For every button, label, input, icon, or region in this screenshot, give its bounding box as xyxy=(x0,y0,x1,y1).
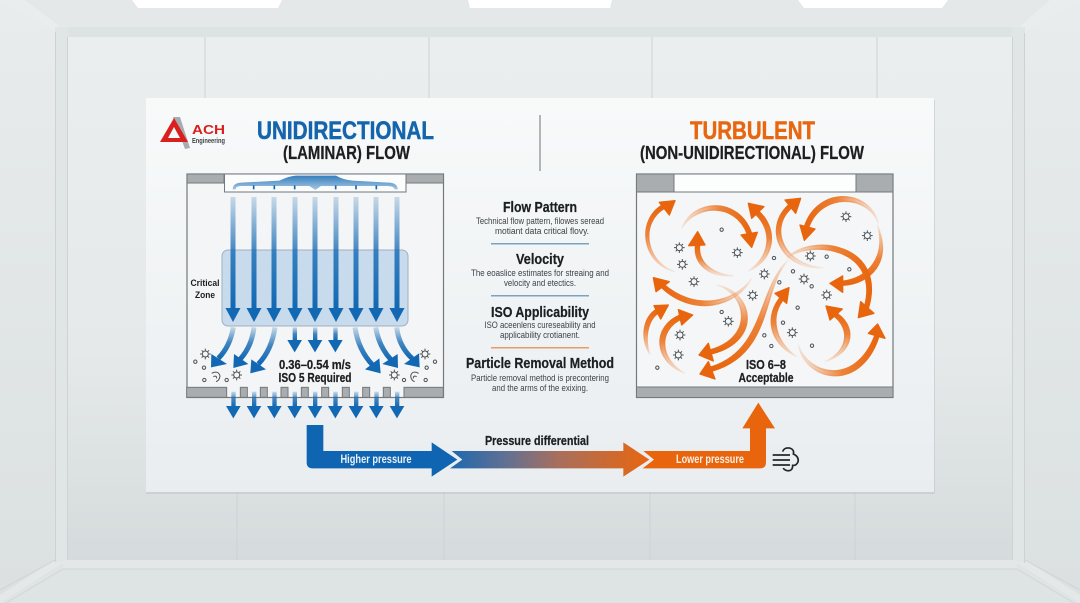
label: velocity and ISO 5 xyxy=(278,357,352,385)
item: velocity: The eoaslice estimates for streaing and xyxy=(471,268,609,278)
icon: air exhaust xyxy=(773,448,798,471)
item: ISO applicability xyxy=(484,304,596,340)
item: ISO applicability: ISO aceenlens cureseability and xyxy=(484,320,596,330)
label: ISO 6-8 acceptable xyxy=(738,357,794,385)
HEPA diffuser air spread xyxy=(233,176,398,190)
item: particle removal method: Particle Removal Method xyxy=(466,355,614,372)
floor grille xyxy=(187,387,443,397)
label: ISO 6-8 acceptable: ISO 6–8 xyxy=(746,357,786,372)
item: flow pattern: motiant data critical flovy. xyxy=(495,226,589,236)
heading: unidirectional xyxy=(257,117,434,163)
comparison column xyxy=(466,199,614,393)
critical zone xyxy=(222,250,408,326)
heading: unidirectional: UNIDIRECTIONAL xyxy=(257,117,434,145)
label: lower pressure: Lower pressure xyxy=(676,454,744,466)
logo: ACH Engineering: ACH xyxy=(192,122,225,137)
logo: ACH Engineering xyxy=(160,117,225,149)
item: flow pattern xyxy=(476,199,604,236)
pressure differential arrow xyxy=(307,403,798,477)
heading: unidirectional: (LAMINAR) FLOW xyxy=(283,143,410,163)
label: higher pressure: Higher pressure xyxy=(340,454,412,466)
logo: ACH Engineering: Engineering xyxy=(192,138,225,145)
item: velocity xyxy=(471,251,609,288)
item: flow pattern: Flow Pattern xyxy=(503,199,577,216)
heading: turbulent: (NON-UNIDIRECTIONAL) FLOW xyxy=(640,143,864,163)
panel: turbulent flow chamber xyxy=(636,174,893,398)
heading: turbulent: TURBULENT xyxy=(690,117,815,145)
panel: laminar flow chamber xyxy=(187,174,444,418)
lower flow arrows, particles, floor grille xyxy=(187,327,443,418)
item: ISO applicability: applicability crotianent. xyxy=(500,330,580,340)
label: velocity and ISO 5: 0.36–0.54 m/s xyxy=(279,357,351,372)
item: velocity: Velocity xyxy=(516,251,565,268)
label: critical zone: Zone xyxy=(195,290,215,301)
label: critical zone: Critical xyxy=(190,278,220,289)
item: particle removal method: and the arms of the exixing. xyxy=(492,383,588,393)
item: particle removal method: Particle removal method is precontering xyxy=(471,373,609,383)
label: pressure differential: Pressure differential xyxy=(485,433,589,448)
item: flow pattern: Technical flow pattern, filowes seread xyxy=(476,216,604,226)
item: particle removal method xyxy=(466,355,614,393)
turbulent swirl arrows and particles xyxy=(644,197,885,379)
ceiling light panels xyxy=(132,0,948,8)
item: ISO applicability: ISO Applicability xyxy=(491,304,590,321)
item: velocity: velocity and etectics. xyxy=(504,278,576,288)
main infographic panel xyxy=(146,98,935,494)
exhaust arrows xyxy=(226,392,404,418)
vertical airflow arrows xyxy=(226,197,404,322)
heading: turbulent xyxy=(640,117,864,163)
label: ISO 6-8 acceptable: Acceptable xyxy=(738,370,794,385)
label: critical zone xyxy=(190,278,220,301)
label: velocity and ISO 5: ISO 5 Required xyxy=(278,370,352,385)
